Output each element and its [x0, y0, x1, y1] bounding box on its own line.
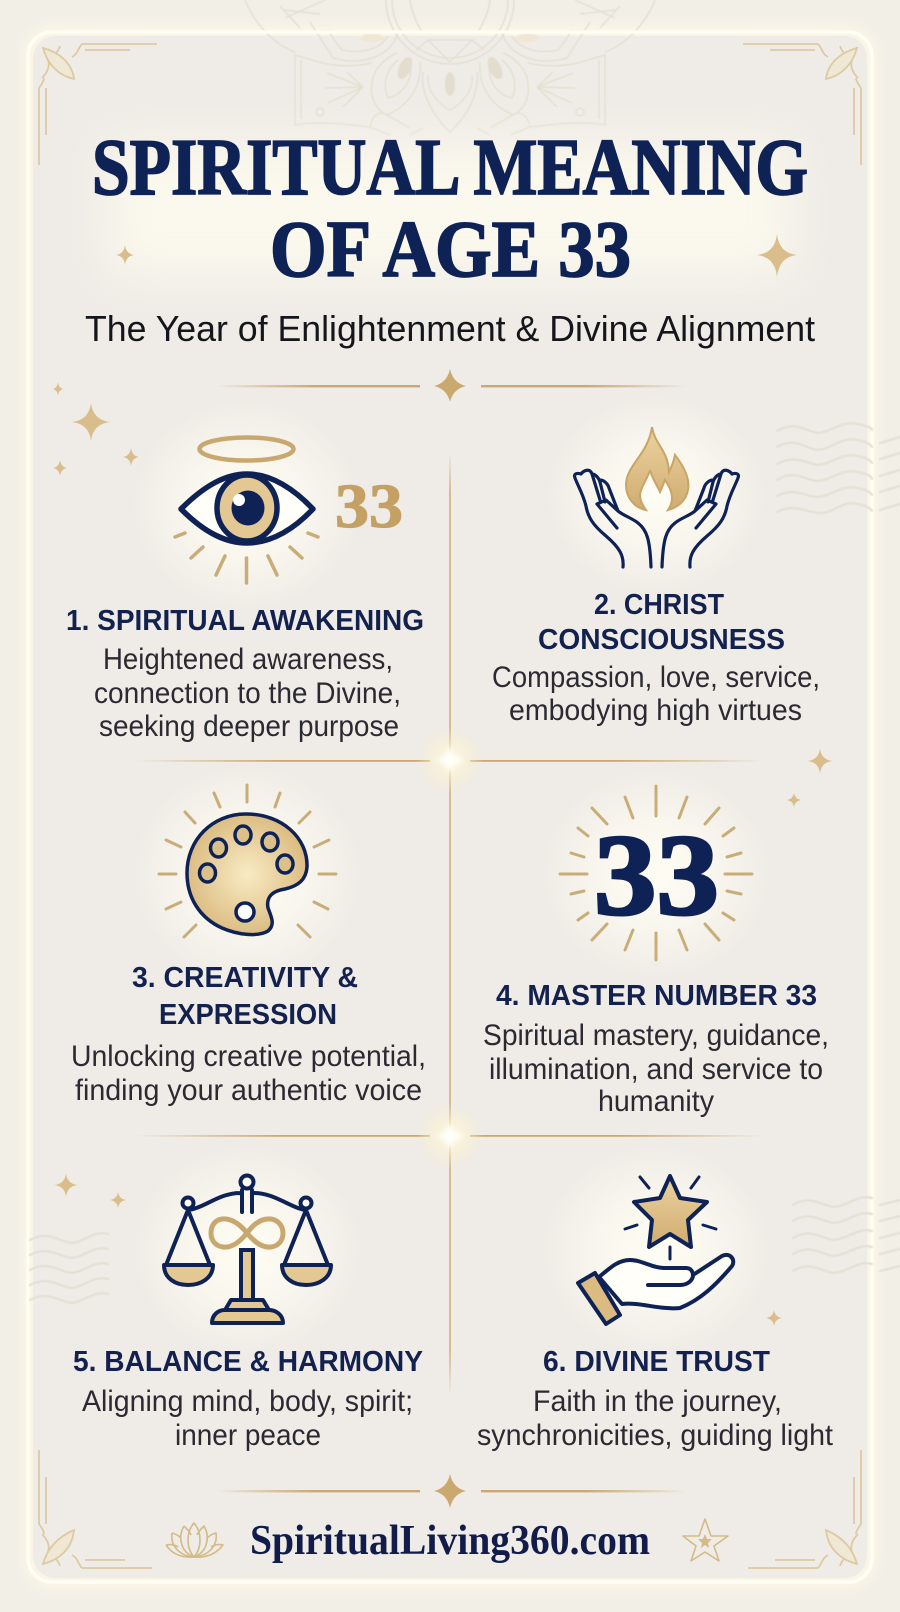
number 33 gold: 33 — [335, 473, 403, 541]
heading 3 — [132, 962, 358, 1031]
corner ornament: top left — [39, 44, 157, 165]
icon: footer star — [683, 1519, 728, 1561]
heading 6: 6. DIVINE TRUST — [543, 1346, 770, 1378]
description 3: finding your authentic voice — [75, 1074, 422, 1107]
heading 5: 5. BALANCE & HARMONY — [73, 1346, 423, 1378]
row divider 2 — [135, 1102, 765, 1170]
description 5: inner peace — [175, 1419, 321, 1452]
panel: creativity and expression — [71, 764, 426, 1107]
icon: lotus — [166, 1523, 223, 1557]
wave decoration left bottom — [30, 1233, 108, 1303]
description 3: Unlocking creative potential, — [71, 1040, 426, 1073]
mandala watermark — [245, 0, 655, 135]
description 4: Spiritual mastery, guidance, — [483, 1019, 829, 1052]
title — [92, 124, 808, 294]
icon: 33 with rays: 33 — [594, 812, 719, 940]
subtitle: The Year of Enlightenment & Divine Alignment — [85, 308, 815, 349]
description 1: seeking deeper purpose — [99, 710, 399, 743]
description 4: humanity — [598, 1085, 714, 1118]
vertical divider — [449, 456, 451, 1396]
icon: 33 with rays — [560, 786, 752, 960]
heading 1: 1. SPIRITUAL AWAKENING — [66, 605, 424, 637]
icon: palette — [159, 785, 336, 937]
heading 2: 2. CHRIST — [594, 589, 724, 621]
panel: balance and harmony — [73, 1145, 423, 1452]
corner ornament: bottom right — [748, 1450, 861, 1568]
heading 3: EXPRESSION — [159, 999, 337, 1031]
corner ornament: bottom left — [39, 1450, 152, 1568]
icon: star over hand — [578, 1176, 733, 1324]
bottom divider with star — [215, 1474, 686, 1508]
panel: divine trust — [477, 1145, 834, 1452]
corner ornament: top right — [743, 44, 861, 165]
description 5 — [82, 1385, 413, 1452]
description 6 — [477, 1385, 834, 1452]
description 6: Faith in the journey, — [533, 1385, 782, 1418]
title: OF AGE 33 — [270, 206, 631, 294]
decorative sparkles — [53, 234, 833, 1326]
row divider 1 — [135, 726, 765, 794]
heading 4: 4. MASTER NUMBER 33 — [496, 980, 817, 1012]
heading 3: 3. CREATIVITY & — [132, 962, 358, 994]
description 4 — [483, 1019, 829, 1118]
description 3 — [71, 1040, 426, 1107]
description 2: embodying high virtues — [509, 694, 802, 727]
description 1: Heightened awareness, — [103, 643, 393, 676]
panel: master number 33 — [483, 769, 829, 1118]
description 4: illumination, and service to — [489, 1053, 823, 1086]
panel: spiritual awakening — [66, 400, 424, 743]
icon: scales with infinity — [164, 1176, 331, 1323]
description 1 — [94, 643, 401, 743]
icon: eye with halo — [175, 438, 318, 583]
heading 2 — [538, 589, 785, 656]
description 6: synchronicities, guiding light — [477, 1419, 834, 1452]
wave decoration right top — [777, 423, 900, 513]
panel: christ consciousness — [492, 395, 820, 727]
description 5: Aligning mind, body, spirit; — [82, 1385, 413, 1418]
title glow — [110, 145, 790, 275]
heading 2: CONSCIOUSNESS — [538, 624, 785, 656]
description 2: Compassion, love, service, — [492, 661, 820, 694]
description 2 — [492, 661, 820, 727]
top divider with star — [215, 369, 686, 402]
description 1: connection to the Divine, — [94, 677, 401, 710]
icon: hands with flame — [575, 427, 738, 567]
wave decoration right bottom — [793, 1197, 900, 1273]
website footer: SpiritualLiving360.com — [250, 1518, 650, 1564]
